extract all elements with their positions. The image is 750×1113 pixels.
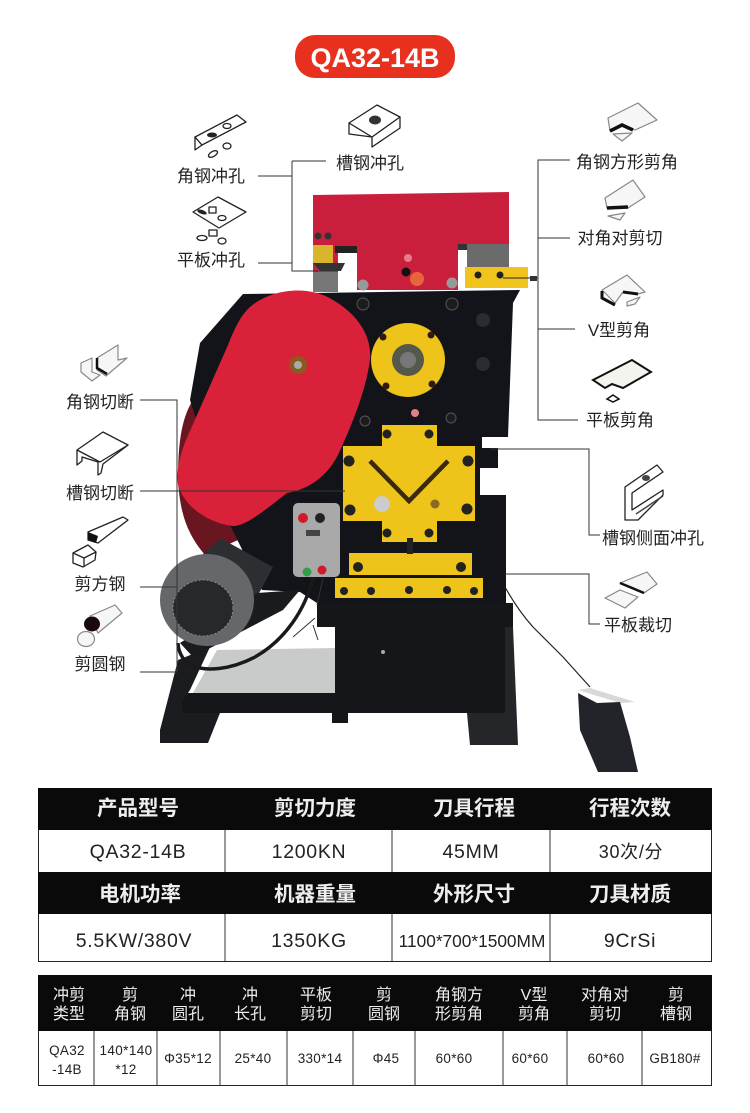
control box (293, 503, 340, 577)
header row: 冲 (242, 986, 258, 1004)
label: angle steel cut: 角钢切断 (66, 393, 134, 412)
spec table 2 (38, 975, 712, 1086)
icon: channel punching (349, 105, 400, 147)
header row: 剪切 (300, 1005, 332, 1023)
data row: Φ35*12 (164, 1051, 212, 1066)
red flywheel cover (177, 290, 370, 526)
data row 2: 1350KG (271, 930, 347, 952)
header row 2: 刀具材质 (589, 883, 671, 906)
icon: diagonal shear (605, 180, 645, 220)
header row: 角钢方 (435, 986, 483, 1004)
label group: shearing left (66, 345, 134, 674)
data row 2: 9CrSi (604, 930, 656, 952)
icon: V notch (602, 275, 645, 306)
header row 1: 行程次数 (589, 797, 671, 820)
header row 1: 产品型号 (97, 797, 179, 820)
electric motor (160, 538, 323, 669)
icon: flat plate punching (193, 197, 246, 244)
header row: 平板 (300, 986, 332, 1004)
icon: channel cut (77, 432, 128, 475)
header row 2: 电机功率 (99, 883, 181, 906)
label: square steel: 剪方钢 (74, 575, 126, 594)
machine photo illustration (160, 192, 638, 772)
header row 2: 机器重量 (274, 883, 356, 906)
header row: 类型 (53, 1005, 85, 1023)
dark flywheel behind cover (178, 400, 300, 555)
spec table 1 (38, 788, 712, 962)
yellow V die plate (343, 425, 475, 542)
header row: 形剪角 (435, 1005, 483, 1023)
label: round steel: 剪圆钢 (74, 655, 126, 674)
header row: 剪角 (518, 1005, 550, 1023)
label: angle square notch: 角钢方形剪角 (576, 153, 678, 172)
label: channel cut: 槽钢切断 (66, 484, 134, 503)
header row: 槽钢 (660, 1005, 692, 1023)
data row 2 (76, 930, 656, 952)
header row: 剪 (668, 986, 684, 1004)
data row: 60*60 (588, 1051, 624, 1066)
label: flat plate cutting: 平板裁切 (604, 616, 672, 635)
black machine body (190, 290, 520, 603)
label: diagonal shear: 对角对剪切 (578, 229, 662, 248)
header row 2: 外形尺寸 (433, 883, 515, 906)
icon: square steel (73, 517, 128, 567)
header row 2 (38, 872, 712, 914)
data row: GB180# (649, 1051, 701, 1066)
icon: angle steel cut (81, 345, 127, 381)
header row: 剪 (376, 986, 392, 1004)
header row 1: 剪切力度 (274, 797, 356, 820)
data row 2: 1100*700*1500MM (399, 931, 545, 951)
data row 1 (90, 841, 663, 863)
header row: V型 (521, 986, 547, 1004)
yellow lower blade bars (335, 538, 483, 598)
machine base and cabinet (160, 603, 518, 745)
label group: shearing right (576, 103, 704, 635)
label: channel punching: 槽钢冲孔 (336, 154, 404, 173)
data row: 140*140 (99, 1043, 153, 1058)
header row: 剪 (122, 986, 138, 1004)
label group: punching (177, 105, 404, 270)
title pill: QA32-14B (310, 43, 440, 73)
header row: 剪切 (589, 1005, 621, 1023)
red top plate (313, 192, 510, 292)
label: flat plate punching: 平板冲孔 (177, 251, 245, 270)
icon: channel side punching (625, 465, 663, 520)
data row 2: 5.5KW/380V (76, 930, 192, 952)
icon: flat plate cutting (605, 572, 657, 608)
icon: round steel (78, 605, 122, 646)
label: flat plate notch: 平板剪角 (586, 411, 654, 430)
yellow shear guard (465, 267, 537, 288)
label: angle punching: 角钢冲孔 (177, 167, 245, 186)
data row 1: 30次/分 (599, 842, 663, 862)
header row: 长孔 (234, 1005, 266, 1023)
data row: 330*14 (298, 1051, 342, 1066)
data row: 60*60 (436, 1051, 472, 1066)
icon: angle steel punching (195, 115, 246, 159)
data row: -14B (52, 1062, 82, 1077)
title pill (295, 35, 455, 78)
data row: *12 (115, 1062, 137, 1077)
header row 1 (38, 788, 712, 830)
label: V notch: V型剪角 (588, 321, 650, 340)
data row 1: 45MM (443, 841, 499, 863)
header row: 冲剪 (53, 986, 85, 1004)
icon: angle square notch (608, 103, 657, 141)
header row: 冲 (180, 986, 196, 1004)
data row (49, 1043, 701, 1077)
header row: 圆孔 (172, 1005, 204, 1023)
foot pedal and cord (505, 587, 638, 772)
header row: 对角对 (581, 986, 629, 1004)
header row (38, 975, 712, 1031)
header row: 圆钢 (368, 1005, 400, 1023)
data row: Φ45 (373, 1051, 399, 1066)
callout leader lines (140, 160, 600, 672)
icon: flat plate notch (593, 360, 651, 402)
data row: 60*60 (512, 1051, 548, 1066)
header row 1: 刀具行程 (433, 797, 515, 820)
yellow flange (371, 323, 445, 397)
data row: 25*40 (235, 1051, 271, 1066)
data row: QA32 (49, 1043, 85, 1058)
header row: 角钢 (114, 1005, 146, 1023)
data row 1: QA32-14B (90, 841, 186, 863)
label: channel side punching: 槽钢侧面冲孔 (602, 529, 704, 548)
data row 1: 1200KN (272, 841, 346, 863)
